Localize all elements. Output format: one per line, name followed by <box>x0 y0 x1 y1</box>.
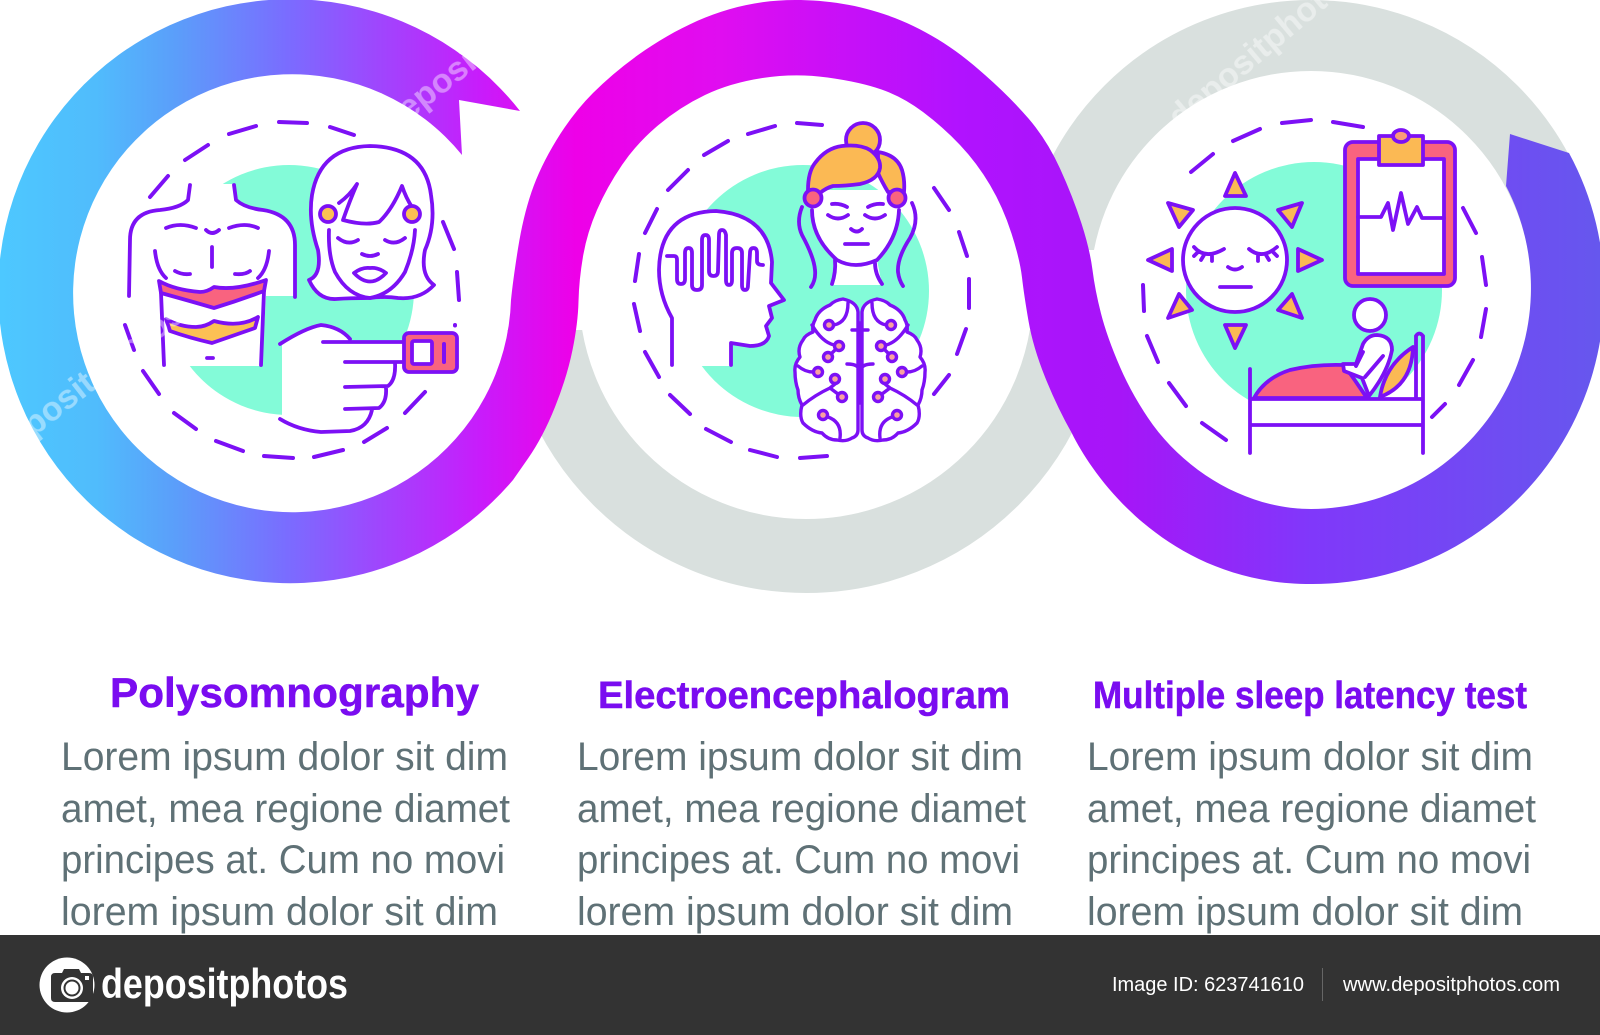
text block: column 2: principes at. Cum no movi <box>577 838 1020 882</box>
text block: column 3: Lorem ipsum dolor sit dim <box>1087 735 1533 779</box>
icon: woman with electrodes <box>309 146 434 299</box>
mint disc 3 <box>1186 162 1442 418</box>
logo wordmark: depositphotos <box>101 960 348 1007</box>
heading: Electroencephalogram: Electroencephalogram <box>598 675 1010 717</box>
text block: column 3: principes at. Cum no movi <box>1087 838 1531 882</box>
icon: chest with belts <box>129 184 296 366</box>
heading: Multiple sleep latency test: Multiple sleep latency test <box>1093 675 1527 717</box>
text block: column 2: amet, mea regione diamet <box>577 787 1026 831</box>
dashed ring 1 <box>125 122 459 458</box>
grey ring: middle circle <box>508 330 1072 593</box>
text block: column 3: amet, mea regione diamet <box>1087 787 1536 831</box>
mint disc 2 <box>677 165 929 417</box>
heading: Polysomnography: Polysomnography <box>110 669 480 716</box>
icon: clipboard with graph <box>1345 130 1455 286</box>
icon: woman with bun and electrodes <box>799 123 916 287</box>
panel: multiple sleep latency test icon <box>1143 120 1486 453</box>
text block: column 1: principes at. Cum no movi <box>61 838 505 882</box>
website: www.depositphotos.com <box>1342 974 1560 996</box>
text block: column 1: Lorem ipsum dolor sit dim <box>61 735 508 779</box>
icon: head with brain wave <box>659 211 784 366</box>
logo icon: camera <box>40 958 94 1012</box>
dashed ring 2 <box>634 123 969 458</box>
text block: column 1 <box>61 735 510 934</box>
dashed ring 3 <box>1143 120 1486 440</box>
panel: electroencephalogram icon <box>634 123 969 458</box>
text block: column 1: amet, mea regione diamet <box>61 787 510 831</box>
image id: Image ID: 623741610 <box>1112 974 1304 996</box>
watermarks <box>0 0 1365 468</box>
grey ring: right circle <box>1053 0 1568 250</box>
icon: hand with pulse oximeter <box>280 325 457 432</box>
icon: circuit brain <box>795 299 925 441</box>
panel: polysomnography icon <box>125 122 459 458</box>
text block: column 2 <box>577 735 1026 934</box>
text block: column 2: lorem ipsum dolor sit dim <box>577 890 1013 934</box>
footer bar <box>0 935 1600 1035</box>
text block: column 2: Lorem ipsum dolor sit dim <box>577 735 1023 779</box>
icon: person sitting in bed <box>1250 299 1423 453</box>
text block: column 1: lorem ipsum dolor sit dim <box>61 890 498 934</box>
text block: column 3 <box>1087 735 1536 934</box>
mint disc 1 <box>164 165 414 415</box>
flowing ribbon <box>0 0 1600 584</box>
icon: sleepy sun <box>1148 173 1322 348</box>
text block: column 3: lorem ipsum dolor sit dim <box>1087 890 1523 934</box>
